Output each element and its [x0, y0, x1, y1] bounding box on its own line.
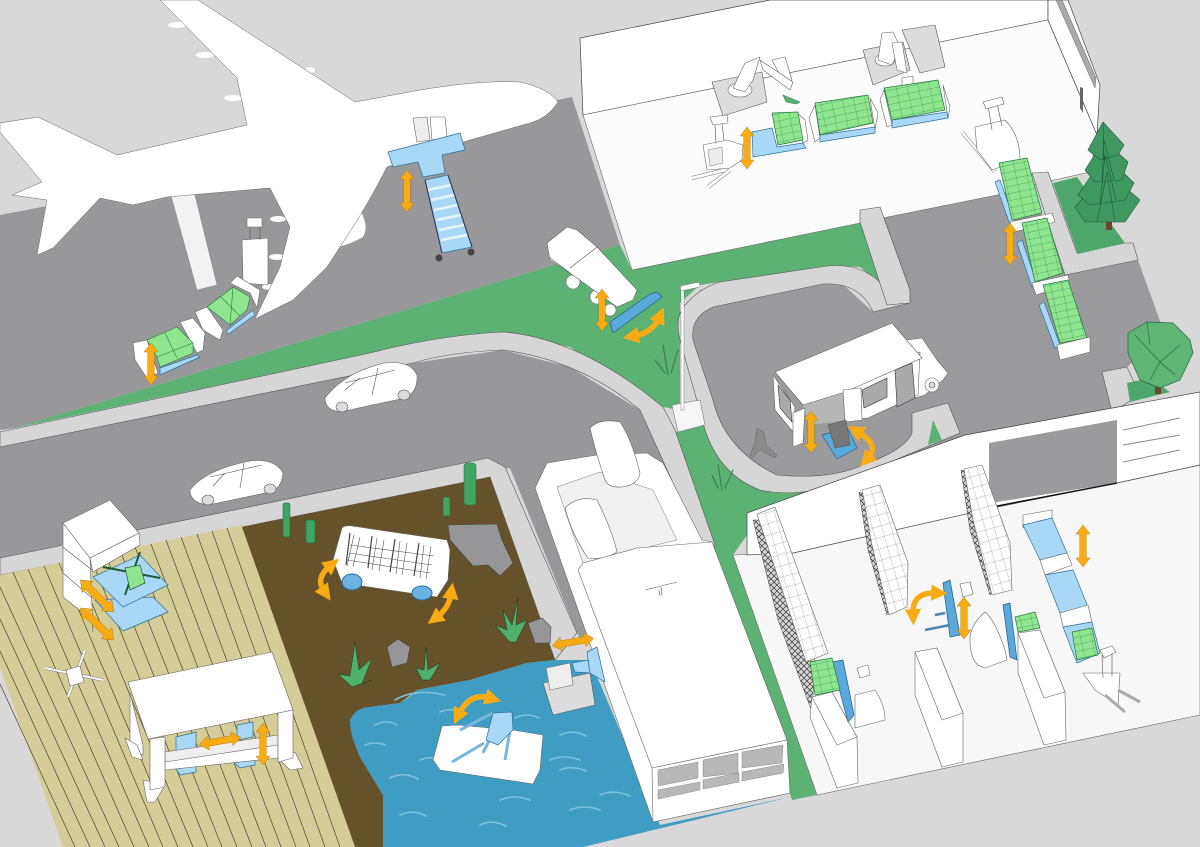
- lower green verge: [676, 425, 830, 800]
- arrows: [75, 127, 1090, 765]
- dock and arm: [543, 647, 605, 715]
- rocks: [387, 524, 551, 667]
- robot arm left: [712, 57, 800, 116]
- cars: [190, 362, 417, 505]
- plane fairings: [168, 22, 315, 290]
- cart 3: [880, 90, 892, 127]
- forklift lower right: [1083, 646, 1140, 712]
- cart 2: [230, 276, 260, 308]
- bus rear: [773, 375, 795, 432]
- boat: [433, 712, 543, 784]
- bus loop curb: [678, 207, 960, 493]
- small green wedge: [928, 420, 942, 445]
- cart 1: [796, 112, 808, 143]
- ferry hull: [535, 453, 790, 822]
- shelves: [810, 630, 1066, 788]
- pine bed and kerb: [1032, 172, 1138, 275]
- ferry front: [652, 740, 790, 822]
- lift truck left: [855, 690, 885, 728]
- warehouse top: wall: [580, 0, 1048, 115]
- plane: [0, 0, 558, 319]
- rack middle: [859, 492, 890, 615]
- lift truck right: [1003, 603, 1017, 660]
- shelf 3: [1018, 630, 1066, 745]
- bus: [773, 323, 948, 447]
- gazebo bars: [165, 735, 278, 764]
- plane engine: [333, 207, 366, 247]
- shelf 1: [810, 692, 858, 788]
- tree: pine: [1075, 122, 1140, 230]
- car on road, upper: [325, 362, 417, 412]
- car on ferry, rear: [590, 421, 640, 487]
- lift trucks warehouse: [810, 580, 1040, 728]
- bus underside: [803, 392, 847, 425]
- lower curb and walk: [0, 458, 577, 660]
- rack right: [961, 470, 992, 595]
- cart 2: [809, 105, 820, 142]
- warehouse lower: back wall: [747, 392, 1200, 555]
- warehouse top: side wall: [1048, 0, 1100, 135]
- forklift upper left: [692, 170, 730, 187]
- water: [350, 660, 790, 847]
- mower: [547, 227, 662, 333]
- brown soil: [242, 477, 555, 847]
- airport tarmac: [0, 97, 620, 430]
- ferry car deck: [557, 472, 677, 563]
- white drone: [45, 650, 103, 697]
- right tarmac: [680, 190, 1165, 490]
- main road curb: [0, 332, 715, 547]
- rack left: [753, 520, 815, 712]
- lift truck centre: [970, 612, 1007, 668]
- gazebo pads: [176, 732, 196, 755]
- bus side: [845, 352, 920, 420]
- forklift upper right: [962, 97, 1020, 172]
- green lawn strip: [15, 223, 887, 428]
- cart 1: [180, 318, 205, 353]
- conveyors: [1023, 510, 1100, 663]
- robot arm right: [863, 25, 945, 93]
- warehouse top: floor: [583, 20, 1097, 270]
- car on ferry, middle: [565, 499, 617, 558]
- gazebo legs: [130, 693, 143, 755]
- cactus group: [283, 463, 476, 543]
- airstair: [388, 117, 474, 262]
- car on road, lower: [190, 460, 283, 505]
- tractor: [242, 238, 268, 285]
- main road: [0, 350, 700, 640]
- pallet column right: [995, 158, 1090, 360]
- bus roof: [775, 323, 922, 405]
- ferry main roof: [578, 542, 787, 768]
- shelf 2: [915, 648, 963, 767]
- warehouse lower: floor: [733, 465, 1200, 795]
- bus hood: [907, 338, 948, 398]
- plants: [338, 345, 733, 687]
- pedestrian: [750, 428, 777, 458]
- wooden deck: [0, 525, 355, 847]
- ferry: [535, 421, 790, 822]
- plane gear strip: [170, 187, 217, 290]
- street lamp: [680, 282, 700, 410]
- pier outline: [860, 207, 910, 305]
- racks: [753, 465, 1012, 712]
- baggage train: [133, 218, 268, 378]
- tree: rounded: [1102, 322, 1193, 412]
- kerb step: [672, 400, 705, 432]
- mast: [645, 582, 677, 596]
- drone station: [63, 500, 168, 632]
- landing pads: [95, 597, 168, 631]
- gazebo roof: [128, 652, 293, 739]
- station body: [63, 523, 93, 632]
- gazebo: [125, 652, 303, 802]
- shuttle pod: [333, 526, 450, 600]
- green drone: [103, 552, 160, 595]
- wheelchair lift: [822, 420, 857, 459]
- curved arrows: [321, 318, 936, 714]
- pallet carts upper: [692, 80, 950, 187]
